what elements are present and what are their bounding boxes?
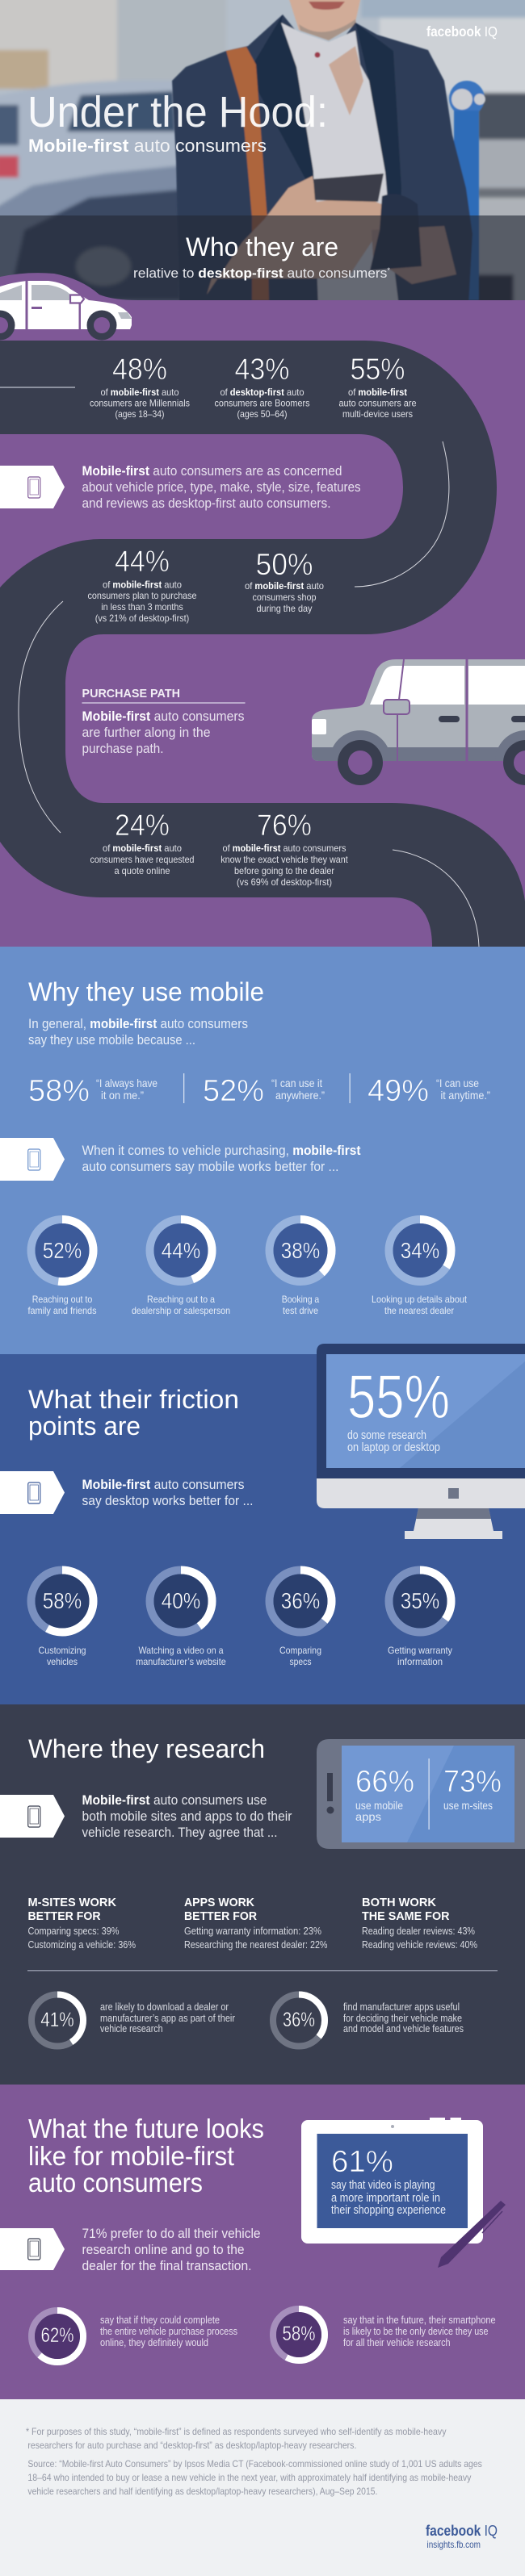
stat: 44% plan to purchase: (vs 21% of desktop-first) (95, 613, 189, 624)
callout tag with phone icon (0, 2228, 65, 2270)
stat: 24% requested a quote (90, 809, 194, 876)
donut: 41% download an app: manufacturer’s app as part of their (100, 2013, 235, 2024)
stat: 49% use it anytime: “I can use (436, 1077, 479, 1089)
callout tag with phone icon (0, 466, 65, 508)
donut: 62% complete purchase online: online, they definitely would (100, 2337, 208, 2348)
stat: 44% plan to purchase (87, 545, 197, 624)
stat: 44% plan to purchase: of mobile-first auto (103, 579, 182, 591)
donut: 40% watching a video (136, 1570, 226, 1667)
text: research agreement: both mobile sites and apps to do their (82, 1809, 292, 1824)
text: purchase path: PURCHASE PATH (82, 688, 180, 700)
donut: 38% test drive (270, 1219, 331, 1316)
stat: 55% multi-device: multi-device users (342, 408, 413, 420)
stat: 55% multi-device (339, 353, 417, 420)
donut: 38% test drive: test drive (283, 1305, 318, 1316)
list: m-sites work better for: BETTER FOR (27, 1909, 101, 1923)
stat: 43% boomers: 43% (234, 353, 289, 386)
donut: 36% manufacturer apps: 36% (283, 2009, 315, 2031)
stat: 50% shop during the day: during the day (257, 603, 312, 614)
panel: footer background (0, 2399, 525, 2576)
donut: 40% watching a video: 40% (162, 1588, 200, 1613)
heading: who they are: relative to desktop-first auto consumers (133, 266, 384, 281)
list: apps work better for (184, 1896, 328, 1951)
panel: where they research background (0, 1704, 525, 2085)
text: concerns (82, 464, 360, 511)
callout tag with phone icon (0, 1138, 65, 1181)
text: vehicle purchasing: auto consumers say mobile works better for ... (82, 1160, 339, 1174)
text: concerns: Mobile-first auto consumers are as concerned (82, 464, 342, 479)
donut: 62% complete purchase online (32, 2310, 237, 2362)
footnote and source (26, 2426, 482, 2497)
donut: 62% complete purchase online: 62% (40, 2324, 74, 2347)
heading: friction points: What their friction (28, 1385, 239, 1414)
list: apps work better for: BETTER FOR (184, 1909, 257, 1923)
icon: landscape phone with stats (317, 1739, 525, 1849)
subtitle: Mobile-first auto consumers (28, 136, 267, 156)
road centre lines (0, 387, 479, 947)
list: both work the same for: BOTH WORK (362, 1896, 436, 1909)
list: m-sites work better for: M-SITES WORK (27, 1896, 116, 1909)
donut: 44% dealership: 44% (162, 1238, 200, 1263)
heading: future: like for mobile-first (28, 2141, 234, 2171)
icon: tablet with 61% stat (301, 2118, 483, 2244)
panel: future background (0, 2085, 525, 2399)
stat: 24% requested a quote: a quote online (115, 865, 170, 876)
stat: 24% requested a quote: consumers have requested (90, 854, 194, 865)
stat: 55% multi-device: 55% (351, 353, 405, 386)
text: purchase path: purchase path. (82, 742, 163, 756)
heading: future: auto consumers (28, 2168, 203, 2198)
donut: 35% warranty: information (397, 1656, 443, 1667)
stat: 48% millennials: 48% (112, 353, 167, 386)
heading: friction points (28, 1385, 239, 1441)
icon: tablet with 61% stat: a more important role in (331, 2192, 440, 2205)
stat: 52% use it anywhere (203, 1074, 325, 1108)
donut: 58% smartphone only: say that in the future, their smartphone (343, 2315, 496, 2326)
logo: facebook IQ footer: insights.fb.com (426, 2539, 481, 2550)
stat: 55% multi-device: auto consumers are (339, 397, 417, 408)
text: concerns: and reviews as desktop-first auto consumers. (82, 496, 331, 511)
stat: 76% know the exact vehicle: (vs 69% of desktop-first) (237, 876, 332, 888)
text: 71% prefer: research online and go to the (82, 2243, 244, 2257)
donut: 40% watching a video: manufacturer’s website (136, 1656, 226, 1667)
donut: 36% comparing specs: specs (289, 1656, 312, 1667)
stat: 48% millennials: (ages 18–34) (115, 408, 165, 420)
panel: friction points background (0, 1354, 525, 1704)
text: desktop works better (82, 1478, 254, 1508)
list: both work the same for: Reading vehicle reviews: 40% (362, 1939, 477, 1951)
donut: 36% comparing specs (270, 1570, 331, 1667)
panel: who they are background (0, 300, 525, 947)
icon: tablet with 61% stat: their shopping experience (331, 2204, 446, 2217)
donut: 35% warranty: 35% (401, 1588, 439, 1613)
donut: 62% complete purchase online: say that if they could complete (100, 2315, 220, 2326)
text: desktop works better: Mobile-first auto consumers (82, 1478, 244, 1492)
stat: 50% shop during the day: 50% (255, 548, 313, 582)
text: research agreement: vehicle research. They agree that ... (82, 1825, 278, 1840)
stat: 44% plan to purchase: in less than 3 months (101, 601, 183, 613)
heading: future: What the future looks (28, 2114, 264, 2143)
list: m-sites work better for: Customizing a vehicle: 36% (27, 1939, 136, 1951)
stat: 58% always have it: it on me.” (101, 1089, 144, 1102)
icon: landscape phone with stats: use mobile (355, 1799, 403, 1812)
icon: stylus pen (438, 2201, 506, 2268)
donut: 58% customizing (31, 1570, 94, 1667)
list: both work the same for (362, 1896, 477, 1951)
stat: 52% use it anywhere: “I can use it (271, 1077, 322, 1089)
text: desktop works better: say desktop works better for ... (82, 1494, 254, 1508)
stat: 58% always have it: “I always have (96, 1077, 158, 1089)
stat: 58% always have it (28, 1074, 158, 1108)
icon: desktop monitor with 55% stat (317, 1344, 525, 1539)
text: purchase path: Mobile-first auto consumers (82, 709, 244, 724)
footnote and source: researchers for auto purchase and “desktop-first” as desktop/laptop-heavy researchers. (27, 2440, 356, 2451)
text: purchase path (82, 688, 246, 756)
text: 71% prefer (82, 2227, 260, 2273)
text: research agreement (82, 1793, 292, 1840)
stat: 50% shop during the day: of mobile-first auto (245, 580, 324, 592)
stat: 48% millennials: of mobile-first auto (100, 387, 179, 398)
donut: 36% manufacturer apps: and model and vehicle features (343, 2023, 464, 2034)
donut: 44% dealership (132, 1219, 230, 1316)
icon: landscape phone with stats: use m-sites (443, 1799, 493, 1812)
list: m-sites work better for (27, 1896, 136, 1951)
donut: 34% nearest dealer (372, 1219, 468, 1316)
stat: 50% shop during the day: consumers shop (252, 592, 317, 603)
icon: landscape phone with stats: 73% (443, 1765, 502, 1799)
donut: 36% manufacturer apps (273, 1995, 464, 2047)
panel: why they use mobile background (0, 947, 525, 1354)
donut: 58% smartphone only: for all their vehicle research (343, 2337, 451, 2348)
footnote and source: vehicle researchers and half identifying as desktop/laptop-heavy researchers), Aug–Sep 2015. (27, 2486, 377, 2497)
stat: 50% shop during the day (245, 548, 324, 614)
stat: 43% boomers: (ages 50–64) (237, 408, 288, 420)
list: both work the same for: THE SAME FOR (362, 1909, 450, 1923)
donut: 41% download an app: vehicle research (100, 2023, 163, 2034)
donut: 58% smartphone only (273, 2309, 496, 2361)
logo: facebook IQ footer (426, 2523, 498, 2550)
icon: landscape phone with stats: apps (355, 1810, 381, 1823)
list: apps work better for: Researching the nearest dealer: 22% (184, 1939, 328, 1951)
donut: 52% family and friends (27, 1219, 97, 1316)
stat: 49% use it anytime (368, 1074, 490, 1108)
heading: why they use mobile: Why they use mobile (28, 977, 264, 1006)
stat: 76% know the exact vehicle: 76% (257, 809, 312, 842)
stat: 49% use it anytime: it anytime.” (441, 1089, 490, 1102)
donut: 52% family and friends: Reaching out to (32, 1294, 93, 1305)
donut: 58% customizing: 58% (43, 1588, 82, 1613)
text: in general: In general, mobile-first auto consumers (28, 1017, 248, 1031)
callout tag with phone icon (0, 1471, 65, 1514)
text: 71% prefer: 71% prefer to do all their vehicle (82, 2227, 260, 2241)
title: Under the Hood: (27, 88, 328, 136)
icon: small car at top of road (0, 273, 137, 341)
list: apps work better for: Getting warranty information: 23% (184, 1926, 321, 1937)
icon: landscape phone with stats: 66% (355, 1765, 414, 1799)
stat: 44% plan to purchase: 44% (115, 545, 170, 578)
text: vehicle purchasing: When it comes to vehicle purchasing, mobile-first (82, 1144, 361, 1158)
donut: 58% smartphone only: 58% (283, 2323, 315, 2345)
road (0, 341, 525, 947)
donut: 35% warranty: Getting warranty (388, 1645, 452, 1656)
donut: 41% download an app: 41% (40, 2009, 74, 2031)
stat: 52% use it anywhere: 52% (203, 1074, 264, 1108)
callout tag with phone icon (0, 1795, 65, 1838)
list: both work the same for: Reading dealer reviews: 43% (362, 1926, 475, 1937)
donut: 41% download an app: are likely to download a dealer or (100, 2001, 229, 2013)
heading: who they are: * (387, 266, 390, 274)
list: apps work better for: APPS WORK (184, 1896, 254, 1909)
icon: desktop monitor with 55% stat: do some research (347, 1429, 426, 1442)
icon: desktop monitor with 55% stat: 55% (347, 1363, 450, 1432)
stat: 58% always have it: 58% (28, 1074, 90, 1108)
donut: 44% dealership: dealership or salesperson (132, 1305, 230, 1316)
stat: 49% use it anytime: 49% (368, 1074, 429, 1108)
donut: 58% customizing: vehicles (47, 1656, 78, 1667)
stat: 24% requested a quote: of mobile-first auto (103, 843, 182, 854)
footnote and source: * For purposes of this study, “mobile-first” is defined as respondents surveyed who self-identify as mobile-heavy (26, 2426, 446, 2437)
donut: 38% test drive: Booking a (282, 1294, 320, 1305)
donut: 52% family and friends: 52% (43, 1238, 82, 1263)
donut: 34% nearest dealer: the nearest dealer (384, 1305, 454, 1316)
donut: 52% family and friends: family and friends (27, 1305, 97, 1316)
donut: 40% watching a video: Watching a video on a (139, 1645, 224, 1656)
heading: friction points: points are (28, 1411, 141, 1441)
stat: 24% requested a quote: 24% (115, 809, 170, 842)
icon: desktop monitor with 55% stat: on laptop or desktop (347, 1441, 440, 1454)
stat: 44% plan to purchase: consumers plan to purchase (87, 590, 197, 601)
icon: tablet with 61% stat: 61% (331, 2145, 393, 2179)
stat: 76% know the exact vehicle: know the exact vehicle they want (220, 854, 348, 865)
icon: tablet with 61% stat: say that video is playing (331, 2179, 435, 2192)
stat: 48% millennials: consumers are Millennials (90, 397, 190, 408)
text: 71% prefer: dealer for the final transaction. (82, 2259, 252, 2273)
heading: who they are (133, 232, 390, 281)
donut: 62% complete purchase online: the entire vehicle purchase process (100, 2326, 237, 2337)
stat: 76% know the exact vehicle: of mobile-first auto consumers (223, 843, 346, 854)
donut: 36% manufacturer apps: for deciding their vehicle make (343, 2013, 462, 2024)
donut: 38% test drive: 38% (281, 1238, 320, 1263)
stat: 48% millennials (90, 353, 190, 420)
text: concerns: about vehicle price, type, make, style, size, features (82, 480, 360, 495)
icon: large car (312, 659, 525, 785)
text: research agreement: Mobile-first auto consumers use (82, 1793, 267, 1808)
donut: 36% comparing specs: Comparing (279, 1645, 321, 1656)
donut: 44% dealership: Reaching out to a (147, 1294, 215, 1305)
stat: 43% boomers: consumers are Boomers (215, 397, 310, 408)
donut: 41% download an app (32, 1995, 235, 2047)
donut: 35% warranty (388, 1570, 452, 1667)
donut: 34% nearest dealer: 34% (401, 1238, 439, 1263)
panel: hero photo (0, 0, 525, 315)
donut: 58% customizing: Customizing (39, 1645, 86, 1656)
stat: 55% multi-device: of mobile-first (348, 387, 407, 398)
footnote and source: 18–64 who intended to buy or lease a new vehicle in the next year, with approximately half identifying as mobile-heavy (27, 2472, 471, 2483)
heading: who they are: Who they are (186, 232, 338, 261)
donut: 36% manufacturer apps: find manufacturer apps useful (343, 2001, 460, 2013)
stat: 52% use it anywhere: anywhere.” (275, 1089, 325, 1102)
donut: 34% nearest dealer: Looking up details about (372, 1294, 468, 1305)
heading: where they research: Where they research (28, 1734, 265, 1763)
stat: 76% know the exact vehicle (220, 809, 348, 888)
list: m-sites work better for: Comparing specs: 39% (27, 1926, 120, 1937)
text: in general: say they use mobile because ... (28, 1033, 195, 1048)
donut: 58% smartphone only: is likely to be the only device they use (343, 2326, 489, 2337)
stat: 43% boomers (215, 353, 310, 420)
logo: facebook IQ footer: facebook IQ (426, 2523, 498, 2539)
text: purchase path: are further along in the (82, 726, 210, 740)
logo: facebook IQ: facebook IQ (426, 23, 498, 40)
stat: 43% boomers: of desktop-first auto (220, 387, 304, 398)
heading: future (28, 2114, 264, 2198)
donut: 36% comparing specs: 36% (281, 1588, 320, 1613)
text: in general (28, 1017, 248, 1048)
stat: 76% know the exact vehicle: before going to the dealer (234, 865, 334, 876)
text: vehicle purchasing (82, 1144, 361, 1174)
